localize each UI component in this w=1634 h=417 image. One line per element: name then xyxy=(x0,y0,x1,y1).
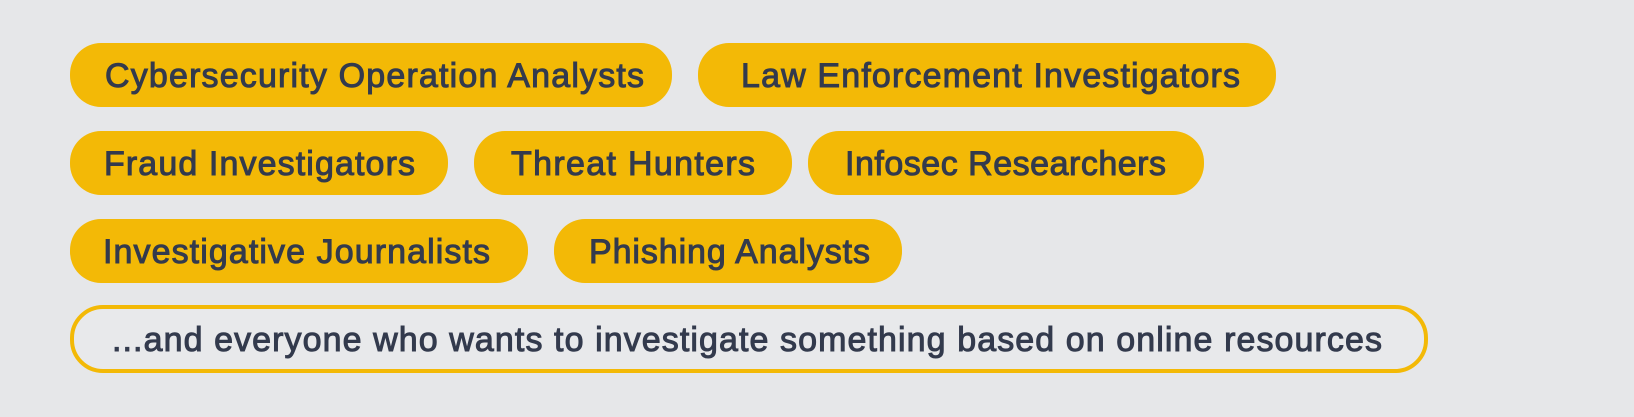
tag: Investigative Journalists: Investigative Journalists xyxy=(103,233,490,271)
tag: Law Enforcement Investigators xyxy=(698,43,1276,107)
tag: Cybersecurity Operation Analysts xyxy=(70,43,672,107)
outlined tag: everyone else: ...and everyone who wants to investigate something based on online resources xyxy=(112,321,1382,359)
tag: Cybersecurity Operation Analysts: Cybersecurity Operation Analysts xyxy=(105,57,644,95)
tag: Infosec Researchers xyxy=(808,131,1204,195)
tag: Fraud Investigators xyxy=(70,131,448,195)
tag: Law Enforcement Investigators: Law Enforcement Investigators xyxy=(741,57,1240,95)
tag: Fraud Investigators: Fraud Investigators xyxy=(104,145,415,183)
tag: Threat Hunters xyxy=(474,131,792,195)
tag: Threat Hunters: Threat Hunters xyxy=(511,145,755,183)
outlined tag: everyone else xyxy=(72,307,1426,371)
tag: Investigative Journalists xyxy=(70,219,528,283)
tag: Phishing Analysts: Phishing Analysts xyxy=(589,233,870,271)
tag: Infosec Researchers: Infosec Researchers xyxy=(845,145,1166,183)
tag: Phishing Analysts xyxy=(554,219,902,283)
